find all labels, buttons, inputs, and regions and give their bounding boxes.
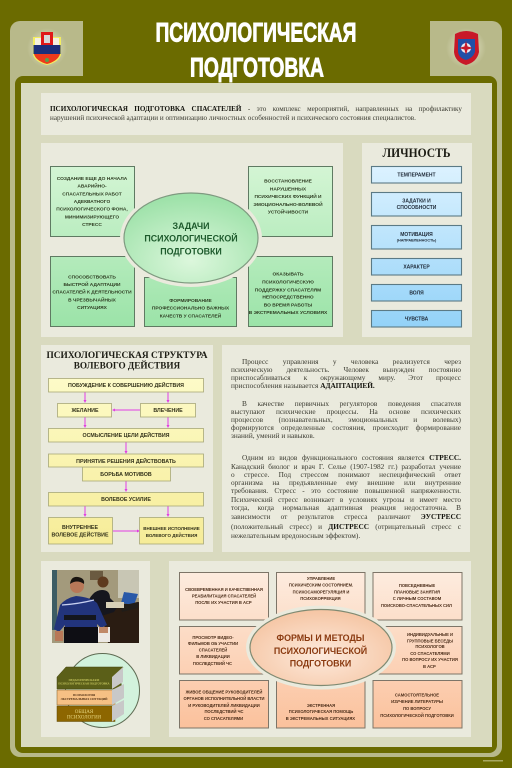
method labels: СВОЕВРЕМЕННАЯ И КАЧЕСТВЕННАЯ	[185, 587, 263, 592]
method labels: ЭКСТРЕННАЯ	[307, 703, 335, 708]
flow boxes	[48, 378, 204, 544]
heading: ПСИХОЛОГИЧЕСКАЯ СТРУКТУРА	[46, 350, 208, 360]
explanatory text: нежелательным вредоносным эффектом).	[231, 530, 360, 540]
method labels: ПЛАНОВЫЕ ЗАНЯТИЯ	[394, 590, 440, 595]
personality labels: МОТИВАЦИЯ	[400, 232, 433, 238]
panel: personality	[362, 143, 472, 337]
method labels: ПОСЛЕДСТВИЙ ЧС	[193, 661, 232, 666]
method labels: УПРАВЛЕНИЕ	[307, 576, 335, 581]
icon: stack of books on circle: ПСИХОЛОГИЯ	[73, 693, 96, 697]
method labels: ПОВСЕДНЕВНЫЕ	[399, 583, 435, 588]
method labels: ПОСЛЕДСТВИЙ ЧС	[204, 709, 244, 714]
method labels: ИНДИВИДУАЛЬНЫЕ И	[407, 632, 453, 637]
icon: stack of books on circle: ПСИХОЛОГИЯ	[67, 716, 102, 720]
task box 1	[50, 166, 134, 236]
method labels: ПО ВОПРОСУ ИХ УЧАСТИЯ	[402, 657, 458, 662]
method labels: ИЗУЧЕНИЕ ЛИТЕРАТУРЫ	[391, 699, 443, 704]
task box 4: КАЧЕСТВ У СПАСАТЕЛЕЙ	[160, 312, 222, 320]
method labels: СО СПАСАТЕЛЯМИ	[204, 716, 243, 721]
explanatory text: процессов (познавательных, эмоциональных и волевых)	[231, 415, 461, 424]
icon: stack of books on circle	[57, 654, 140, 728]
task box 2: ЭМОЦИОНАЛЬНО-ВОЛЕВОЙ	[253, 200, 323, 208]
method labels: СПАСАТЕЛЕЙ	[199, 648, 227, 653]
panel: forms and methods	[169, 561, 471, 737]
explanatory text: приспособления называется АДАПТАЦИЕЙ.	[231, 381, 375, 390]
methods ellipse: ПСИХОЛОГИЧЕСКОЙ	[274, 645, 367, 656]
method labels: ФИЛЬМОВ ОБ УЧАСТИИ	[188, 641, 238, 646]
title: ПСИХОЛОГИЧЕСКАЯ	[156, 18, 356, 48]
method labels: САМОСТОЯТЕЛЬНОЕ	[395, 693, 439, 698]
explanatory text	[231, 357, 461, 540]
method labels: В ЭКСТРЕМАЛЬНЫХ СИТУАЦИЯХ	[286, 716, 355, 721]
task box 2: ПСИХИЧЕСКИХ ФУНКЦИЙ И	[254, 192, 322, 200]
task box 1: СПАСАТЕЛЬНЫХ РАБОТ	[62, 191, 122, 197]
panel: volitional structure	[41, 345, 213, 552]
method labels: ПСИХОКОРРЕКЦИЯ	[300, 596, 341, 601]
flow labels: ВНУТРЕННЕЕ	[62, 525, 98, 531]
tasks ellipse: ПСИХОЛОГИЧЕСКОЙ	[144, 232, 238, 244]
method labels: ПОИСКОВО-СПАСАТЕЛЬНЫХ СИЛ	[381, 603, 452, 608]
task box 5: ВО ВРЕМЯ РАБОТЫ	[264, 303, 313, 309]
personality boxes	[372, 166, 462, 327]
flow labels: ВОЛЕВОЕ ДЕЙСТВИЕ	[52, 530, 109, 538]
explanatory text: (положительный стресс) и ДИСТРЕСС (отрицательный стресс с	[231, 522, 461, 531]
personality labels: ХАРАКТЕР	[403, 264, 430, 270]
task box 1: АВАРИЙНО-	[77, 182, 107, 190]
panel: definition background	[41, 93, 471, 135]
explanatory text: Канадский биолог и врач Г. Селье (1907-1982 гг.) разработал учение	[231, 462, 461, 470]
task box 5: ПСИХОЛОГИЧЕСКУЮ	[262, 279, 314, 285]
method labels: СО СПАСАТЕЛЯМИ	[410, 651, 450, 656]
task box 2	[248, 166, 332, 236]
icon: stack of books on circle: ПЕДАГОГИЧЕСКАЯ И	[69, 679, 100, 682]
personality labels: ЗАДАТКИ И	[402, 198, 431, 204]
icon: stack of books on circle: ОБЩАЯ	[75, 710, 94, 715]
flow labels: БОРЬБА МОТИВОВ	[100, 472, 152, 478]
task box 2: УСТОЙЧИВОСТИ	[268, 208, 309, 216]
method labels: ПСИХИЧЕСКИМ СОСТОЯНИЕМ.	[289, 583, 353, 588]
personality labels: СПОСОБНОСТИ	[397, 205, 437, 211]
explanatory text: тогда, когда нормальная адаптивная реакция недостаточна. В	[231, 503, 461, 512]
photo: rescuer during psychological testing	[52, 570, 139, 643]
task box 5: ОКАЗЫВАТЬ	[273, 272, 304, 278]
flow labels: ПОБУЖДЕНИЕ К СОВЕРШЕНИЮ ДЕЙСТВИЯ	[68, 381, 184, 389]
definition text: нарушений психической адаптации и оптимизацию личностных особенностей и психического состояния специалистов.	[50, 114, 416, 122]
personality labels: ВОЛЯ	[409, 290, 424, 296]
methods ellipse: ФОРМЫ И МЕТОДЫ	[277, 633, 365, 643]
explanatory text: выступают психические процессы. На основе психических	[231, 407, 461, 416]
method boxes	[180, 572, 462, 728]
icon: civil defence emblem	[27, 28, 67, 68]
personality labels: ЧУВСТВА	[405, 316, 429, 322]
explanatory text: формируются определенные состояния, происходит формирование	[231, 423, 461, 432]
method labels: ПСИХОЛОГИЧЕСКОЙ ПОДГОТОВКИ	[380, 713, 454, 718]
heading: ВОЛЕВОГО ДЕЙСТВИЯ	[74, 360, 181, 370]
flow labels: ВОЛЕВОГО ДЕЙСТВИЯ	[146, 531, 197, 538]
task box 1: ПСИХОЛОГИЧЕСКОГО ФОНА,	[56, 207, 128, 213]
task box 3: СИТУАЦИЯХ	[77, 305, 108, 311]
title: ПОДГОТОВКА	[190, 52, 324, 82]
task box 2: ВОССТАНОВЛЕНИЕ	[264, 179, 313, 185]
task box 3: БЫСТРОЙ АДАПТАЦИИ	[63, 280, 121, 288]
explanatory text: психическую деятельность. Человек вынужден постоянно	[231, 365, 461, 374]
methods ellipse	[246, 606, 396, 690]
task box 1: МИНИМИЗИРУЮЩЕГО	[65, 214, 119, 220]
arrows	[84, 392, 170, 532]
task box 2: НАРУШЕННЫХ	[270, 186, 307, 192]
method labels: ПСИХОСАМОРЕГУЛЯЦИЯ И	[293, 589, 349, 594]
icon: stack of books on circle: ПСИХОЛОГИЧЕСКАЯ ПОДГОТОВКА	[58, 682, 110, 686]
task box 3	[50, 256, 134, 326]
task box 1: СТРЕСС	[82, 222, 102, 228]
task box 5: НЕПОСРЕДСТВЕННО	[262, 295, 314, 301]
panel: explanatory text background	[222, 345, 470, 552]
method labels: ПОСЛЕ ИХ УЧАСТИЯ В АСР	[195, 600, 252, 605]
task box 4	[144, 278, 236, 326]
method labels: ПРОСМОТР ВИДЕО-	[192, 635, 234, 640]
method labels: И РУКОВОДИТЕЛЕЙ ЛИКВИДАЦИИ	[188, 703, 260, 708]
icon: stack of books on circle: ЭКСТРЕМАЛЬНЫХ СИТУАЦИЙ	[61, 696, 108, 701]
methods ellipse: ПОДГОТОВКИ	[290, 658, 351, 668]
title	[156, 18, 356, 82]
task box 3: СПОСОБСТВОВАТЬ	[68, 274, 116, 280]
explanatory text: организма на предъявленные ему внешние или внутренние	[231, 478, 461, 486]
explanatory text: о стрессе. Под стрессом понимают неспецифический ответ	[231, 470, 461, 478]
explanatory text: Процесс управления у человека реализуется через	[242, 357, 461, 366]
method labels: В АСР	[423, 664, 436, 669]
flow labels: ПРИНЯТИЕ РЕШЕНИЯ ДЕЙСТВОВАТЬ	[76, 457, 176, 465]
method labels: В ЛИКВИДАЦИИ	[196, 654, 230, 659]
tasks ellipse: ЗАДАЧИ	[173, 221, 209, 231]
task box 3: СПАСАТЕЛЕЙ К ДЕЯТЕЛЬНОСТИ	[52, 288, 132, 296]
task box 4: ФОРМИРОВАНИЕ	[169, 298, 213, 304]
definition text: ПСИХОЛОГИЧЕСКАЯ ПОДГОТОВКА СПАСАТЕЛЕЙ - это комплекс мероприятий, направленных на профилактику	[50, 105, 462, 113]
task box 4: ПРОФЕССИОНАЛЬНО ВАЖНЫХ	[152, 306, 230, 312]
method labels: ПСИХОЛОГОВ	[415, 644, 445, 649]
task box 5	[248, 256, 332, 326]
method labels: РЕАБИЛИТАЦИЯ СПАСАТЕЛЕЙ	[192, 594, 256, 599]
personality labels: (НАПРАВЛЕННОСТЬ)	[397, 239, 437, 243]
heading: ЛИЧНОСТЬ	[382, 146, 450, 160]
explanatory text: Одним из видов функционального состояния является СТРЕСС.	[242, 453, 461, 462]
flow labels: ВОЛЕВОЕ УСИЛИЕ	[101, 497, 151, 503]
task box 5: В ЭКСТРЕМАЛЬНЫХ УСЛОВИЯХ	[249, 310, 328, 316]
method labels: С ЛИЧНЫМ СОСТАВОМ	[393, 596, 442, 601]
task box 5: ПОДДЕРЖКУ СПАСАТЕЛЯМ	[255, 287, 321, 293]
explanatory text: Психический стресс возникает в условиях угрозы и имеет место	[231, 494, 461, 504]
tasks ellipse	[120, 189, 262, 287]
explanatory text: знаний, умений и навыков.	[231, 431, 315, 440]
explanatory text: приспосабливаться к окружающему миру. Этот процесс	[231, 373, 461, 382]
method labels: ПО ВОПРОСУ	[403, 706, 431, 711]
flow labels: ОСМЫСЛЕНИЕ ЦЕЛИ ДЕЙСТВИЯ	[83, 431, 170, 439]
flow labels: ВНЕШНЕЕ ИСПОЛНЕНИЕ	[143, 526, 200, 531]
task box 3: В ЧРЕЗВЫЧАЙНЫХ	[68, 295, 117, 303]
panel: tasks	[41, 143, 343, 337]
flow labels: ЖЕЛАНИЕ	[70, 408, 99, 414]
method labels: ПСИХОЛОГИЧЕСКАЯ ПОМОЩЬ	[289, 709, 353, 714]
definition text	[50, 104, 462, 122]
method labels: ЖИВОЕ ОБЩЕНИЕ РУКОВОДИТЕЛЕЙ	[185, 690, 262, 695]
tasks ellipse: ПОДГОТОВКИ	[160, 246, 222, 256]
method labels: ГРУППОВЫЕ БЕСЕДЫ	[407, 638, 453, 643]
task box 1: АДЕКВАТНОГО	[74, 199, 110, 205]
explanatory text: требования. Стресс - это состояние повышенной напряженности.	[231, 486, 461, 495]
explanatory text: зависимости от результатов стресса различают ЭУСТРЕСС	[231, 512, 461, 521]
method labels: ОРГАНОВ ИСПОЛНИТЕЛЬНОЙ ВЛАСТИ	[184, 696, 264, 701]
flow labels: ВЛЕЧЕНИЕ	[153, 408, 183, 414]
panel: photo and books	[41, 561, 150, 737]
explanatory text: В качестве первичных регуляторов поведения спасателя	[242, 399, 461, 408]
icon: rescue service emblem	[446, 28, 486, 68]
personality labels: ТЕМПЕРАМЕНТ	[397, 172, 436, 178]
task box 1: СОЗДАНИЕ ЕЩЕ ДО НАЧАЛА	[57, 176, 128, 182]
